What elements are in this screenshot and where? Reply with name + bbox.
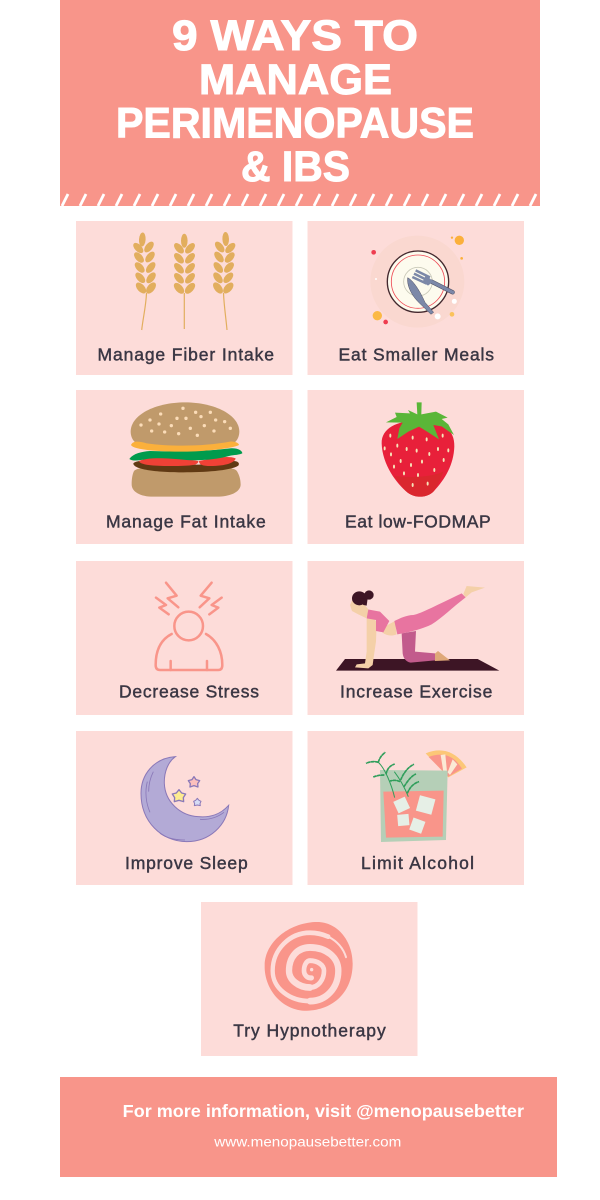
icon: wheat xyxy=(131,232,237,330)
label: Manage Fiber Intake xyxy=(98,345,274,365)
label: Eat Smaller Meals xyxy=(338,345,494,365)
title xyxy=(116,12,474,191)
label: Decrease Stress xyxy=(119,681,259,701)
footer website: www.menopausebetter.com xyxy=(213,1134,401,1149)
footer banner xyxy=(60,1077,557,1177)
card: manage fat intake xyxy=(76,390,292,544)
icon: burger xyxy=(129,402,242,497)
icon: crescent moon with stars xyxy=(141,757,229,842)
label: Eat low-FODMAP xyxy=(345,511,491,531)
title: 9 WAYS TO xyxy=(172,12,418,60)
header banner xyxy=(60,0,540,206)
title: MANAGE xyxy=(199,56,392,104)
card: eat smaller meals xyxy=(308,221,524,375)
label: Limit Alcohol xyxy=(361,853,474,873)
icon: strawberry xyxy=(382,402,454,497)
footer call to action: For more information, visit @menopausebetter xyxy=(123,1101,524,1121)
label: Manage Fat Intake xyxy=(106,511,266,531)
label: Try Hypnotherapy xyxy=(233,1021,386,1041)
card: eat low-FODMAP xyxy=(308,390,524,544)
title: & IBS xyxy=(241,143,350,191)
label: Increase Exercise xyxy=(340,681,492,701)
card: try hypnotherapy xyxy=(201,902,418,1056)
icon: plate with cutlery xyxy=(370,236,464,328)
icon: cocktail xyxy=(366,750,467,842)
label: Improve Sleep xyxy=(125,853,248,873)
card: increase exercise xyxy=(308,561,524,715)
card: decrease stress xyxy=(76,561,292,715)
card: limit alcohol xyxy=(308,731,524,885)
icon: stressed person xyxy=(156,583,222,670)
icon: woman exercising on a mat xyxy=(336,586,499,671)
card: improve sleep xyxy=(76,731,292,885)
icon: spiral xyxy=(265,922,353,1011)
title: PERIMENOPAUSE xyxy=(116,100,474,148)
card: manage fiber intake xyxy=(76,221,292,375)
